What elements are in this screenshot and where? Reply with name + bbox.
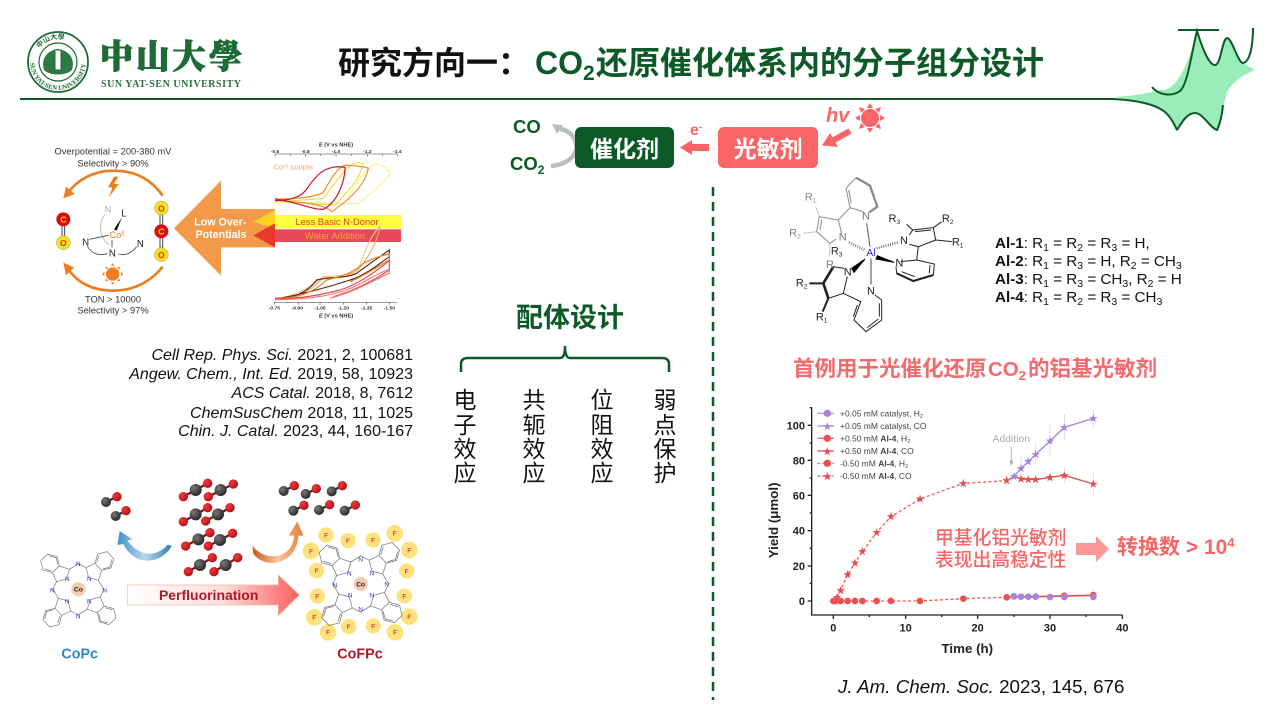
axis labels: 30	[1044, 622, 1056, 634]
axis labels: 10	[900, 622, 912, 634]
CoFPc structure: F	[407, 614, 411, 621]
series: CO dashed: ★	[850, 558, 860, 568]
CoFPc structure	[309, 531, 411, 637]
electron arrow	[680, 122, 709, 155]
axis labels: 40	[793, 526, 805, 538]
cobalt complex: Co	[109, 230, 121, 240]
CoFPc structure: N	[358, 556, 363, 563]
front ligand	[809, 258, 882, 332]
big orange arrow: Potentials	[196, 229, 247, 241]
Al series definitions: 1	[1043, 278, 1049, 290]
axis labels: 40	[1116, 622, 1128, 634]
weak point protection: 弱	[654, 387, 676, 413]
CO molecule: O	[60, 238, 67, 248]
cobalt complex: N	[105, 205, 111, 215]
weak point protection: 保	[654, 436, 676, 462]
reference: right: J. Am. Chem. Soc. 2023, 145, 676	[837, 676, 1124, 697]
atom labels: 3	[896, 219, 900, 226]
stability note: 表现出高稳定性	[935, 549, 1066, 570]
bottom CV chart: -1.05	[314, 306, 326, 312]
atom labels: 1	[824, 317, 828, 324]
atom labels: R	[889, 213, 896, 225]
CoPc structure: N	[76, 613, 81, 620]
steric effect: 位	[590, 387, 614, 413]
CoPc structure: N	[76, 561, 81, 568]
series: CO with Al-4: ★	[1060, 470, 1069, 480]
bottom caption: Selectivity > 97%	[77, 306, 149, 316]
stability note	[935, 527, 1066, 570]
legend: 2	[905, 464, 908, 470]
axis labels: 0	[799, 596, 805, 608]
CoPc structure: N	[87, 599, 92, 606]
right ligand	[876, 222, 952, 281]
CoPc structure	[41, 552, 116, 627]
legend: ★	[823, 446, 832, 456]
legend: -0.50 mM Al-4, H	[840, 458, 905, 468]
references: left: Chin. J. Catal. 2023, 44, 160-167	[178, 423, 413, 440]
references: left: Angew. Chem., Int. Ed. 2019, 58, 10923	[128, 366, 413, 383]
CoFPc structure: N	[370, 593, 375, 600]
yield line chart	[766, 407, 1128, 656]
header: logo: SUN YAT-SEN UNIVERSITY	[30, 62, 86, 90]
cobalt complex: L	[121, 209, 127, 220]
pink arrow	[1076, 536, 1109, 562]
top CV chart	[271, 142, 402, 212]
top CV chart: E (V vs NHE)	[319, 142, 353, 148]
light arrow	[822, 131, 850, 147]
orange curved arrow	[252, 521, 303, 563]
axis labels: 80	[793, 455, 805, 467]
CoFPc structure: Co	[356, 581, 365, 588]
axis labels: 20	[793, 561, 805, 573]
series: CO dashed: ★	[886, 512, 896, 522]
CoPc structure: N	[102, 587, 107, 594]
CoFPc structure: N	[384, 581, 389, 588]
Al series definitions: = CH	[1117, 289, 1156, 306]
yellow band: Less Basic N-Donor	[296, 217, 378, 227]
Al series definitions: 3	[1156, 296, 1162, 308]
turnover number callout: 4	[1227, 535, 1235, 550]
CoFPc structure: F	[326, 630, 330, 637]
CO molecule: C	[60, 215, 67, 225]
atom labels: 1	[813, 197, 817, 204]
CoPc label: CoPc	[61, 647, 98, 663]
atom labels: 3	[839, 252, 843, 259]
atom labels: N	[844, 267, 852, 279]
header: logo	[27, 31, 242, 93]
perfluorination arrow: Perfluorination	[159, 587, 258, 603]
catalyst box: 催化剂	[590, 136, 659, 162]
photosensitizer box	[718, 127, 818, 168]
perfluorination arrow	[128, 575, 299, 616]
axis labels: Yield (μmol)	[766, 482, 781, 558]
atom labels: Al	[866, 248, 876, 259]
series: CO with catalyst	[1009, 413, 1098, 481]
title: 还原催化体系内的分子组分设计	[596, 45, 1044, 81]
CO2 label: 2	[538, 163, 545, 177]
aluminium complex structure	[789, 178, 964, 332]
Al series definitions: 3	[1077, 260, 1083, 272]
CoFPc structure: F	[324, 532, 328, 539]
weak point protection: 护	[654, 460, 676, 486]
weak point protection: 点	[654, 412, 676, 438]
panel: cobalt complex low overpotential figure	[55, 142, 402, 320]
red band: Water Addition	[305, 231, 365, 241]
series: CO with Al-4	[1014, 470, 1098, 489]
axes	[808, 407, 1122, 619]
legend: ★	[823, 471, 832, 481]
atom labels: N	[895, 258, 903, 270]
top CV chart: -0.8	[301, 149, 310, 155]
Al series definitions	[995, 235, 1182, 308]
atom labels: R	[942, 213, 950, 225]
Al series definitions: 1	[1043, 260, 1049, 272]
top CV chart: -1.0	[332, 149, 341, 155]
Al series definitions: 2	[1131, 260, 1137, 272]
series: CO dashed: ★	[836, 585, 845, 595]
Al series definitions: = CH	[1083, 271, 1122, 288]
gray conversion arrow	[551, 124, 576, 166]
Al series definitions: 1	[1043, 296, 1049, 308]
legend: +0.05 mM catalyst, H	[840, 408, 920, 418]
red heading: first aluminium photosensitizer: 首例用于光催化还原	[793, 357, 987, 381]
CO molecules	[101, 481, 360, 521]
Al series definitions: Al-2: R	[995, 253, 1043, 270]
Al series definitions: 3	[1176, 260, 1182, 272]
axis labels: 0	[830, 622, 836, 634]
axis labels: Time (h)	[942, 641, 993, 656]
error bars	[891, 410, 1093, 522]
CoFPc structure: F	[371, 537, 375, 544]
atom labels: 1	[960, 243, 964, 250]
series: CO with catalyst: ★	[1009, 471, 1019, 481]
red heading: first aluminium photosensitizer: 2	[1019, 368, 1026, 383]
atom labels: N	[900, 235, 908, 247]
legend	[817, 408, 927, 481]
series: CO with catalyst: ★	[1060, 422, 1069, 432]
legend: +0.50 mM Al-4, CO	[840, 446, 914, 456]
Al series definitions: Al-1: R	[995, 235, 1043, 252]
bottom CV chart: -0.90	[292, 306, 303, 312]
title	[338, 45, 1044, 85]
atom labels: 2	[950, 219, 954, 226]
stability note: 甲基化铝光敏剂	[935, 527, 1066, 548]
atom labels: 2	[804, 283, 808, 290]
lightning icon	[108, 177, 119, 197]
CoFPc fluorine halos	[303, 525, 418, 641]
top CV chart: -1.2	[363, 149, 372, 155]
references: left	[128, 347, 413, 440]
legend: -0.50 mM Al-4, CO	[840, 471, 912, 481]
Al series definitions: = H	[1153, 271, 1182, 288]
references: left: Cell Rep. Phys. Sci. 2021, 2, 100681	[152, 347, 413, 364]
series: CO with Al-4: ★	[1016, 474, 1026, 484]
CO2 molecules cluster	[179, 479, 242, 576]
title: 2	[583, 62, 595, 85]
catalyst box	[575, 127, 674, 168]
Al series definitions: = H, R	[1083, 253, 1131, 270]
series: CO dashed: ★	[959, 478, 968, 488]
legend: 2	[907, 439, 910, 445]
series: CO dashed: ★	[1002, 476, 1011, 486]
Al series definitions: = R	[1083, 289, 1111, 306]
series: CO dashed: ★	[832, 592, 842, 602]
addition annotation	[993, 434, 1030, 466]
bottom CV chart: -1.35	[361, 306, 373, 312]
CoFPc structure: N	[370, 571, 375, 578]
atom labels: N	[839, 232, 847, 244]
Al series definitions: 3	[1122, 278, 1128, 290]
conjugation effect: 轭	[522, 412, 546, 438]
CoPc structure: N	[65, 576, 70, 583]
CO2 molecule: O	[158, 203, 165, 213]
atom labels: 2	[797, 234, 801, 241]
bottom caption	[77, 294, 149, 316]
top CV chart: Co	[273, 163, 283, 172]
logo english name: SUN YAT-SEN UNIVERSITY	[101, 79, 242, 90]
catalyst / photosensitizer scheme	[510, 103, 885, 177]
atom labels: R	[805, 191, 813, 203]
CoFPc structure: F	[312, 615, 316, 622]
series: CO with catalyst: ★	[1045, 436, 1055, 446]
CO2 molecule	[154, 201, 168, 262]
CoFPc structure: F	[315, 593, 319, 600]
red heading: first aluminium photosensitizer	[793, 357, 1157, 383]
Al series definitions: Al-3: R	[995, 271, 1043, 288]
Al series definitions: 1	[1043, 242, 1049, 254]
ligand design factors	[454, 387, 676, 486]
top caption: Overpotential = 200-380 mV	[55, 146, 172, 156]
atom labels: R	[831, 246, 839, 258]
series: CO with catalyst: ★	[1031, 449, 1040, 459]
axis labels	[766, 420, 1128, 656]
CoFPc structure: F	[393, 630, 397, 637]
CoFPc structure: F	[371, 623, 375, 630]
Al series definitions: 2	[1077, 296, 1083, 308]
electron arrow: e	[690, 122, 699, 139]
cobalt complex: N	[82, 237, 89, 248]
Al series definitions: = CH	[1137, 253, 1176, 270]
references: left: ChemSusChem 2018, 11, 1025	[190, 405, 413, 422]
header rule and wave decoration	[20, 28, 1255, 130]
CO2 label: CO	[510, 153, 538, 174]
references: left: ACS Catal. 2018, 8, 7612	[231, 385, 413, 402]
sun icon	[855, 103, 885, 133]
series: CO with Al-4: ★	[1089, 479, 1098, 489]
legend: ★	[823, 421, 832, 431]
sun icon	[102, 263, 123, 285]
CoFPc structure: N	[348, 593, 353, 600]
top caption: Selectivity > 90%	[77, 158, 149, 168]
electronic effect: 应	[454, 460, 476, 486]
Al series definitions: 3	[1077, 278, 1083, 290]
series: CO dashed: ★	[872, 527, 881, 537]
electron arrow: -	[699, 122, 702, 133]
series: CO with catalyst: ★	[1016, 463, 1026, 473]
atom labels: R	[826, 259, 834, 271]
CoFPc structure: F	[407, 547, 411, 554]
Al series definitions: = R	[1049, 253, 1077, 270]
axis labels: 20	[972, 622, 984, 634]
red heading: first aluminium photosensitizer: CO	[988, 358, 1019, 381]
CoFPc structure: F	[393, 531, 397, 538]
CoPc structure: N	[65, 599, 70, 606]
CO label: CO	[513, 116, 541, 137]
cobalt complex: II	[121, 231, 125, 237]
CoFPc structure: F	[347, 624, 351, 631]
series: CO with Al-4: ★	[1045, 472, 1055, 482]
CoPc structure: N	[50, 587, 55, 594]
axis labels: 60	[793, 490, 805, 502]
atom labels: N	[862, 211, 870, 223]
series: CO dashed: ★	[915, 494, 925, 504]
cycle arrows	[67, 171, 163, 291]
hv label: hv	[826, 105, 851, 127]
Al series definitions: 3	[1111, 242, 1117, 254]
steric effect: 效	[590, 436, 614, 462]
bottom CV chart: -1.20	[338, 306, 349, 312]
Al series definitions: = R	[1049, 235, 1077, 252]
series: CO with catalyst: ★	[1024, 457, 1033, 467]
CO2 molecule: C	[158, 227, 165, 237]
top CV chart: -0.6	[271, 149, 280, 155]
big orange arrow	[174, 181, 275, 276]
bottom CV chart: -0.75	[269, 306, 280, 312]
conjugation effect: 应	[522, 460, 546, 486]
atom labels: N	[867, 285, 875, 297]
top CV chart: -1.4	[393, 149, 402, 155]
photosensitizer box: 光敏剂	[734, 136, 802, 162]
series: CO dashed: ★	[843, 570, 852, 580]
red band	[253, 223, 401, 247]
legend: +0.05 mM catalyst, CO	[840, 421, 927, 431]
atom labels: R	[789, 228, 797, 240]
CoFPc structure: F	[402, 593, 406, 600]
electronic effect: 电	[454, 387, 476, 413]
steric effect: 应	[590, 460, 614, 486]
bottom CV chart	[269, 223, 397, 320]
top CV chart: couple	[288, 163, 313, 172]
Al series definitions: = R	[1049, 289, 1077, 306]
axis labels: 100	[787, 420, 805, 432]
Al series definitions: 2	[1148, 278, 1154, 290]
title: 研究方向一：	[338, 45, 530, 81]
cobalt complex: N	[137, 239, 144, 250]
conjugation effect: 效	[522, 436, 546, 462]
electronic effect: 效	[454, 436, 476, 462]
series: CO with catalyst: ★	[1089, 413, 1098, 423]
cobalt complex	[82, 205, 144, 259]
top caption	[55, 146, 172, 168]
Al series definitions: = R	[1083, 235, 1111, 252]
CoPc structure: N	[87, 576, 92, 583]
blue curved arrow	[117, 531, 172, 561]
back ligand	[803, 178, 877, 257]
Al series definitions: 3	[1111, 296, 1117, 308]
bottom CV chart: -1.50	[384, 306, 395, 312]
CoFPc structure: F	[405, 568, 409, 575]
CO2 molecule: O	[158, 250, 165, 260]
conjugation effect: 共	[522, 387, 546, 413]
atom labels	[789, 191, 964, 324]
title: CO	[535, 45, 583, 81]
top CV chart: II/I	[283, 163, 288, 168]
turnover number callout: 转换数 > 10	[1117, 536, 1227, 559]
CO molecule	[56, 212, 70, 250]
steric effect: 阻	[590, 412, 614, 438]
header: logo: 中山大學	[36, 33, 64, 47]
ligand design heading: 配体设计	[516, 303, 624, 333]
red heading: first aluminium photosensitizer: 的铝基光敏剂	[1028, 357, 1157, 381]
cobalt complex: N	[109, 248, 116, 259]
yellow band	[253, 210, 401, 228]
CoFPc structure: F	[346, 538, 350, 545]
Al series definitions: Al-4: R	[995, 289, 1043, 306]
series: CO with Al-4: ★	[1031, 475, 1040, 485]
bottom CV chart: E (V vs NHE)	[319, 314, 353, 320]
logo wordmark: 中山大學	[100, 39, 242, 76]
atom labels: R	[816, 311, 824, 323]
CoFPc structure: N	[347, 571, 352, 578]
atom labels: R	[796, 277, 804, 289]
CoFPc structure: N	[358, 607, 363, 614]
legend: 2	[920, 414, 923, 420]
series: H2	[830, 592, 1097, 604]
CoFPc structure: F	[315, 568, 319, 575]
Al series definitions: , R	[1128, 271, 1148, 288]
CoFPc label: CoFPc	[337, 647, 383, 663]
Al series definitions: = H,	[1117, 235, 1150, 252]
big orange arrow: Low Over-	[194, 216, 247, 228]
logo emblem	[28, 32, 88, 92]
electronic effect: 子	[454, 412, 476, 438]
series: CO dashed: ★	[858, 547, 867, 557]
legend: +0.50 mM Al-4, H	[840, 433, 907, 443]
CoPc structure: Co	[74, 587, 83, 594]
Al series definitions: = R	[1049, 271, 1077, 288]
CoFPc structure: F	[309, 548, 313, 555]
series: CO dashed	[832, 476, 1014, 602]
series: CO with Al-4: ★	[1024, 474, 1033, 484]
CoFPc structure: N	[333, 583, 338, 590]
panel: perfluorination figure	[41, 479, 418, 663]
bracket	[461, 346, 669, 372]
dashed divider	[712, 187, 714, 700]
atom labels: R	[952, 237, 960, 249]
Al series definitions: 2	[1077, 242, 1083, 254]
bottom caption: TON > 10000	[85, 294, 141, 304]
addition annotation: Addition	[993, 434, 1030, 445]
